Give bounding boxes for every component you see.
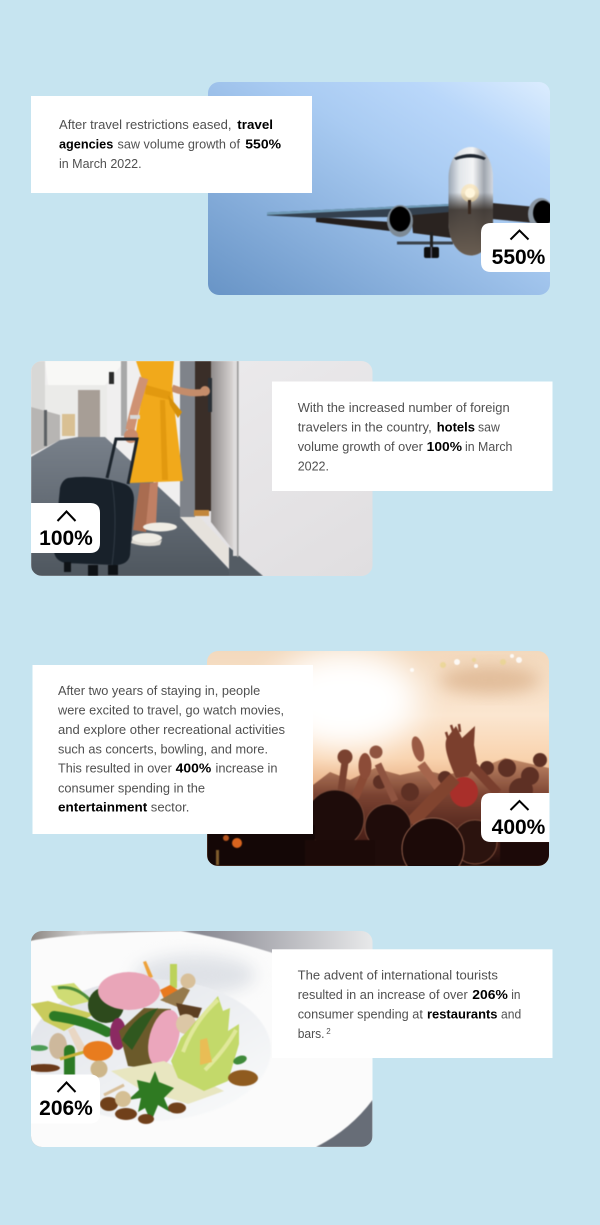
photo: airplane in blue sky (208, 82, 554, 295)
text box: hotels: With the increased number of foreign (298, 400, 510, 415)
panel: entertainment (32, 650, 550, 880)
text box: hotels: 2022. (298, 458, 329, 473)
text box: hotels: volume growth of over (298, 439, 424, 454)
text box: hotels: saw (478, 419, 500, 434)
text box: entertainment: were excited to travel, go watch movies, (57, 702, 284, 718)
text box: entertainment: such as concerts, bowling, and more. (58, 741, 268, 756)
badge: 206% (31, 1074, 100, 1124)
icon: up chevron (58, 1082, 76, 1092)
text box: hotels (272, 382, 552, 491)
text box: entertainment (32, 665, 313, 834)
text box: restaurants: consumer spending at (298, 1007, 423, 1022)
panel: travel agencies (31, 82, 554, 295)
badge: 550%: 550% (492, 246, 546, 269)
badge: 550% (481, 223, 550, 272)
icon: up chevron (510, 230, 528, 240)
text box: entertainment: entertainment (58, 800, 148, 815)
badge: 206%: 206% (39, 1097, 93, 1120)
text box: entertainment: consumer spending in the (58, 780, 205, 795)
text box: restaurants: 2 (326, 1027, 331, 1036)
text box: hotels: hotels (437, 419, 475, 434)
text box: entertainment: sector. (151, 800, 189, 815)
icon: up chevron (58, 512, 76, 521)
photo: plated food (25, 931, 380, 1150)
text box: entertainment: and explore other recreational activities (58, 722, 285, 737)
text box: restaurants (272, 949, 552, 1058)
text box: travel agencies: in March 2022. (59, 156, 142, 171)
badge: 100% (31, 503, 100, 553)
text box: restaurants: 206% (472, 987, 508, 1002)
text box: travel agencies (31, 96, 312, 193)
photo: concert crowd (207, 650, 550, 880)
text box: restaurants: restaurants (427, 1007, 498, 1022)
panel: restaurants (25, 931, 552, 1150)
text box: restaurants: The advent of international tourists (298, 967, 498, 982)
badge: 400% (481, 793, 550, 842)
text box: travel agencies: After travel restrictions eased, (59, 117, 232, 132)
panel: hotels (31, 361, 552, 576)
text box: travel agencies: agencies (59, 137, 113, 152)
badge: 100%: 100% (39, 527, 93, 550)
text box: travel agencies: saw volume growth of (118, 137, 240, 152)
text box: entertainment: 400% (176, 761, 212, 776)
text box: restaurants: and (501, 1007, 521, 1022)
badge: 400%: 400% (492, 816, 546, 839)
icon: up chevron (510, 801, 528, 810)
photo: traveler with suitcase at hotel door (31, 361, 373, 576)
text box: entertainment: After two years of staying in, people (58, 683, 260, 698)
text box: hotels: in March (465, 439, 512, 454)
text box: restaurants: bars. (298, 1026, 324, 1041)
text box: hotels: travelers in the country, (298, 419, 432, 434)
text box: restaurants: in (511, 987, 520, 1002)
text box: entertainment: This resulted in over (58, 761, 172, 776)
text box: hotels: 100% (427, 439, 462, 454)
text box: travel agencies: travel (237, 117, 273, 132)
text box: restaurants: resulted in an increase of over (298, 987, 468, 1002)
text box: travel agencies: 550% (245, 137, 281, 152)
text box: entertainment: increase in (216, 761, 278, 776)
